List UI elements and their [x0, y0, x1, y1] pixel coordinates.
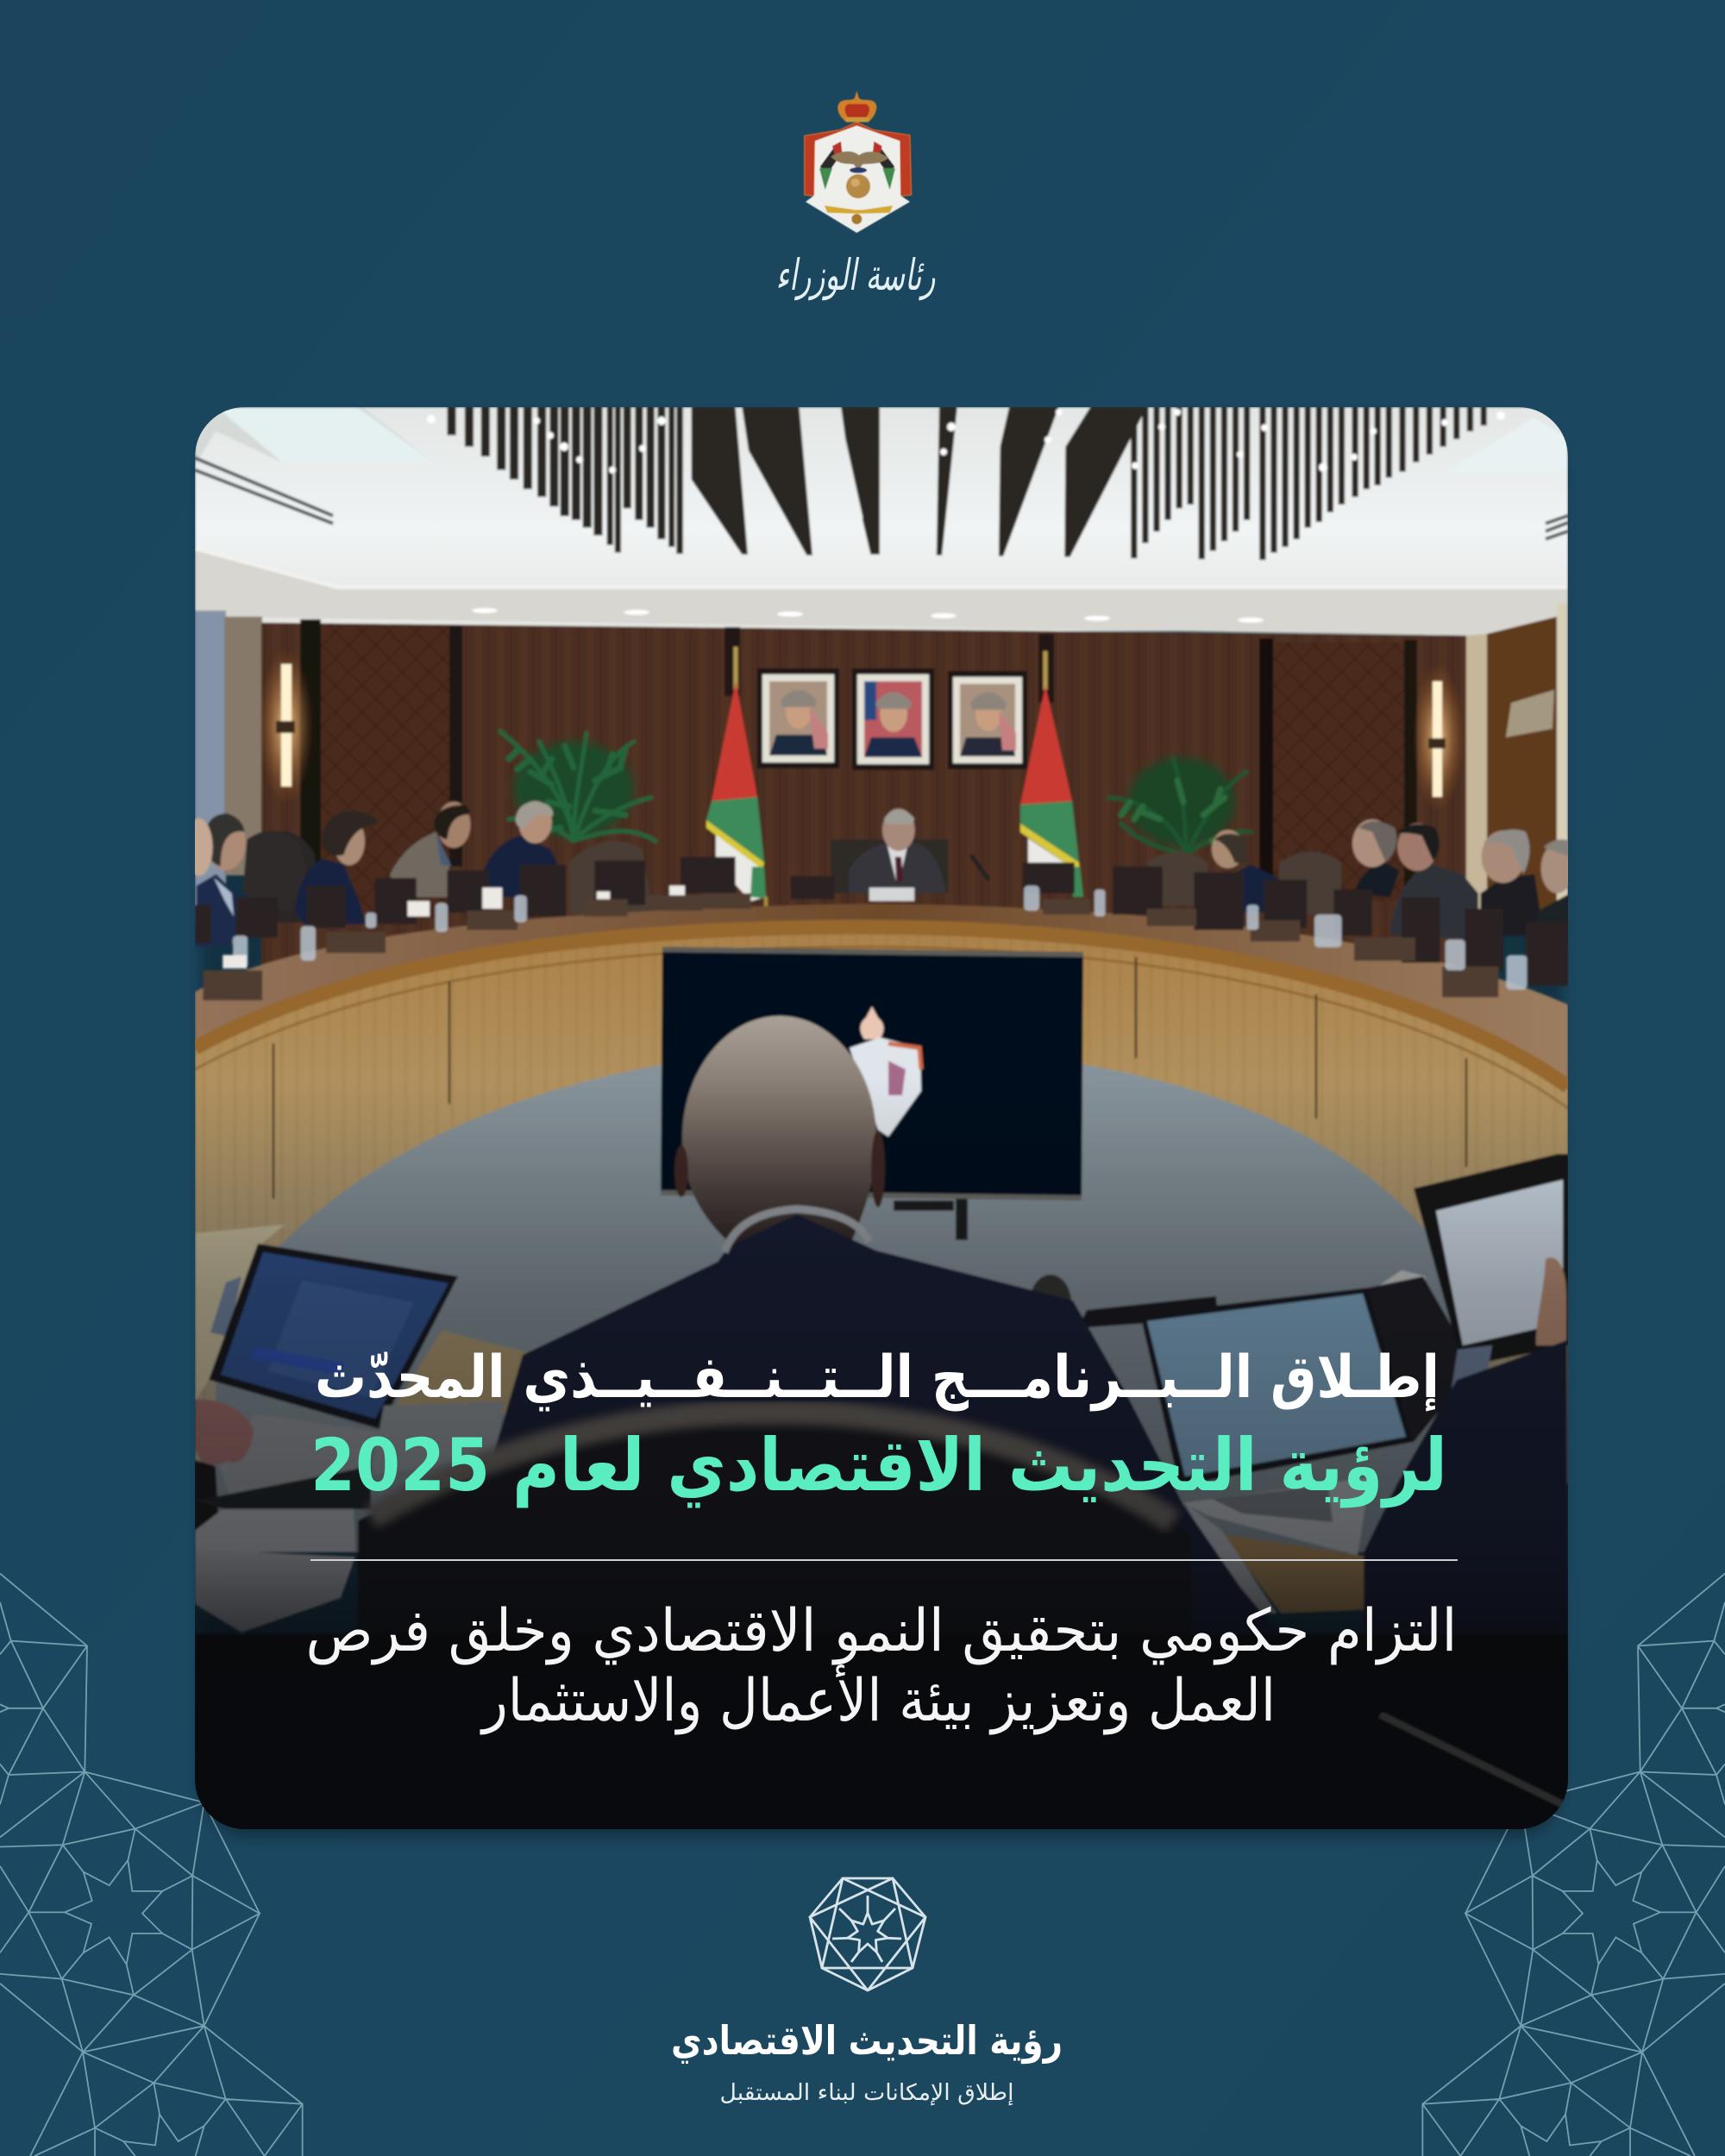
flag: right: [1020, 651, 1083, 897]
foreground person seen from behind: [358, 1016, 1277, 1829]
star medal: [851, 214, 862, 224]
seven pointed lattice: [810, 1878, 925, 1990]
table boxes, screens and bottles: [195, 856, 1568, 1000]
wood table patch: [392, 1331, 535, 1414]
headline line 1: إطـلاق الــبــرنامـــج الــتــنــفــيــذي المحدّث: [315, 1344, 1440, 1412]
table top: [195, 903, 1568, 1078]
hand: [195, 1400, 254, 1465]
laptop: left: [209, 1244, 505, 1505]
spokes: [832, 1896, 901, 1962]
white paper strip: [1185, 1503, 1277, 1614]
empty chairs: [250, 830, 1341, 923]
faint chair highlight lower right: [1380, 1714, 1567, 1807]
wood tabletop: [1222, 1534, 1377, 1614]
wood wall: [260, 604, 1568, 966]
calligraphy: prime ministry: رئاسة الوزراء: [776, 250, 935, 301]
bottom dark strip: [195, 1634, 1568, 1833]
body line 1: التزام حكومي بتحقيق النمو الاقتصادي وخلق فرص: [305, 1597, 1458, 1665]
wall sconces: [259, 649, 1464, 811]
right laptop: [1414, 1154, 1568, 1367]
ears: [674, 1130, 885, 1207]
ceiling slats: [427, 407, 1505, 560]
foreground table and items: left: [195, 1225, 535, 1633]
head: [682, 1016, 876, 1246]
eagle: [831, 151, 888, 171]
ceiling: [195, 407, 1568, 636]
panel: meeting photo: [185, 407, 1573, 1833]
icon: royal coat of arms: [805, 91, 912, 233]
inner seven pointed star: [848, 1913, 888, 1952]
people: right side of table: [1212, 819, 1573, 943]
chairman at head of table: [831, 809, 988, 901]
foreground chair back: [358, 1404, 1191, 1829]
mantle: [805, 122, 912, 196]
dark item on left edge: [195, 1460, 220, 1548]
decorative geometric pattern: bottom left: [0, 1574, 303, 2156]
right person: [1364, 1340, 1568, 1829]
flag: left: [706, 647, 766, 914]
dark phone and gear: [1078, 1296, 1218, 1328]
body text: [305, 1597, 1458, 1735]
body line 2: العمل وتعزيز بيئة الأعمال والاستثمار: [480, 1664, 1276, 1735]
shield: [806, 126, 910, 233]
dark gradient overlay: [195, 1078, 1568, 1829]
globe: [846, 167, 870, 198]
table front panel: [195, 927, 1568, 1483]
ceiling downlights: [472, 608, 1264, 623]
water bottle: [210, 1276, 242, 1337]
microphone: [1030, 1275, 1071, 1330]
beige table edge: [195, 1225, 285, 1401]
paper stacks: [195, 1507, 355, 1552]
footer tagline: إطلاق الإمكانات لبناء المستقبل: [719, 2080, 1014, 2106]
emblem on monitor: [850, 1006, 921, 1137]
decorative geometric pattern: bottom right: [1422, 1574, 1725, 2156]
left wall and curtain: [195, 611, 262, 921]
carpet: [216, 1048, 1466, 1552]
center right laptop: [1140, 1288, 1414, 1556]
flags: [819, 141, 895, 190]
people: left side of table: [185, 801, 560, 947]
ribbon: [825, 205, 893, 214]
bottle on right: [1449, 1345, 1492, 1406]
jacket: [358, 1214, 1277, 1829]
foreground items: right: [1078, 1154, 1568, 1829]
napkin: [1380, 1270, 1426, 1310]
divider: [310, 1559, 1458, 1561]
shirt collar: [724, 1209, 869, 1252]
photo shadow: [200, 417, 1563, 1838]
portraits: [757, 668, 1027, 770]
heptagon outline: [810, 1878, 925, 1990]
center monitor: [661, 947, 1083, 1240]
plants: [500, 731, 1251, 854]
footer title: رؤية التحديث الاقتصادي: [671, 2017, 1063, 2064]
headline line 2: لرؤية التحديث الاقتصادي لعام 2025: [310, 1423, 1447, 1508]
icon: economic modernization vision emblem: [810, 1878, 925, 1990]
hand on right laptop: [1536, 1257, 1566, 1345]
crown: [837, 91, 876, 122]
